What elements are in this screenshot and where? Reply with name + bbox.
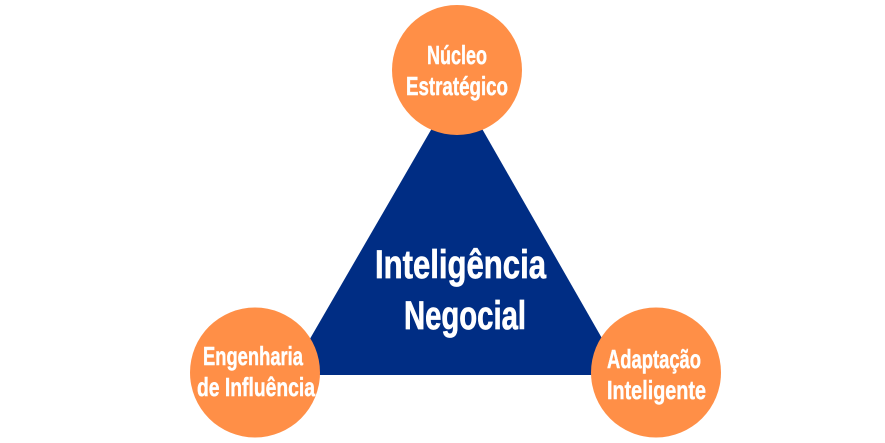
node: Núcleo Estratégico: Núcleo: [427, 40, 487, 70]
node: Núcleo Estratégico: [392, 5, 522, 135]
node: Núcleo Estratégico: Estratégico: [406, 71, 508, 101]
node: Engenharia de Influência: [190, 308, 320, 438]
node: Engenharia de Influência: Engenharia: [203, 341, 303, 371]
central title: Negocial: [404, 294, 526, 338]
node: Adaptação Inteligente: Inteligente: [607, 375, 706, 405]
central title: [375, 243, 547, 338]
node: Engenharia de Influência: de Influência: [197, 372, 315, 402]
node: Adaptação Inteligente: Adaptação: [607, 344, 701, 374]
central title: Inteligência: [375, 243, 547, 287]
node: Adaptação Inteligente: [591, 308, 721, 438]
central triangle: [289, 85, 623, 375]
